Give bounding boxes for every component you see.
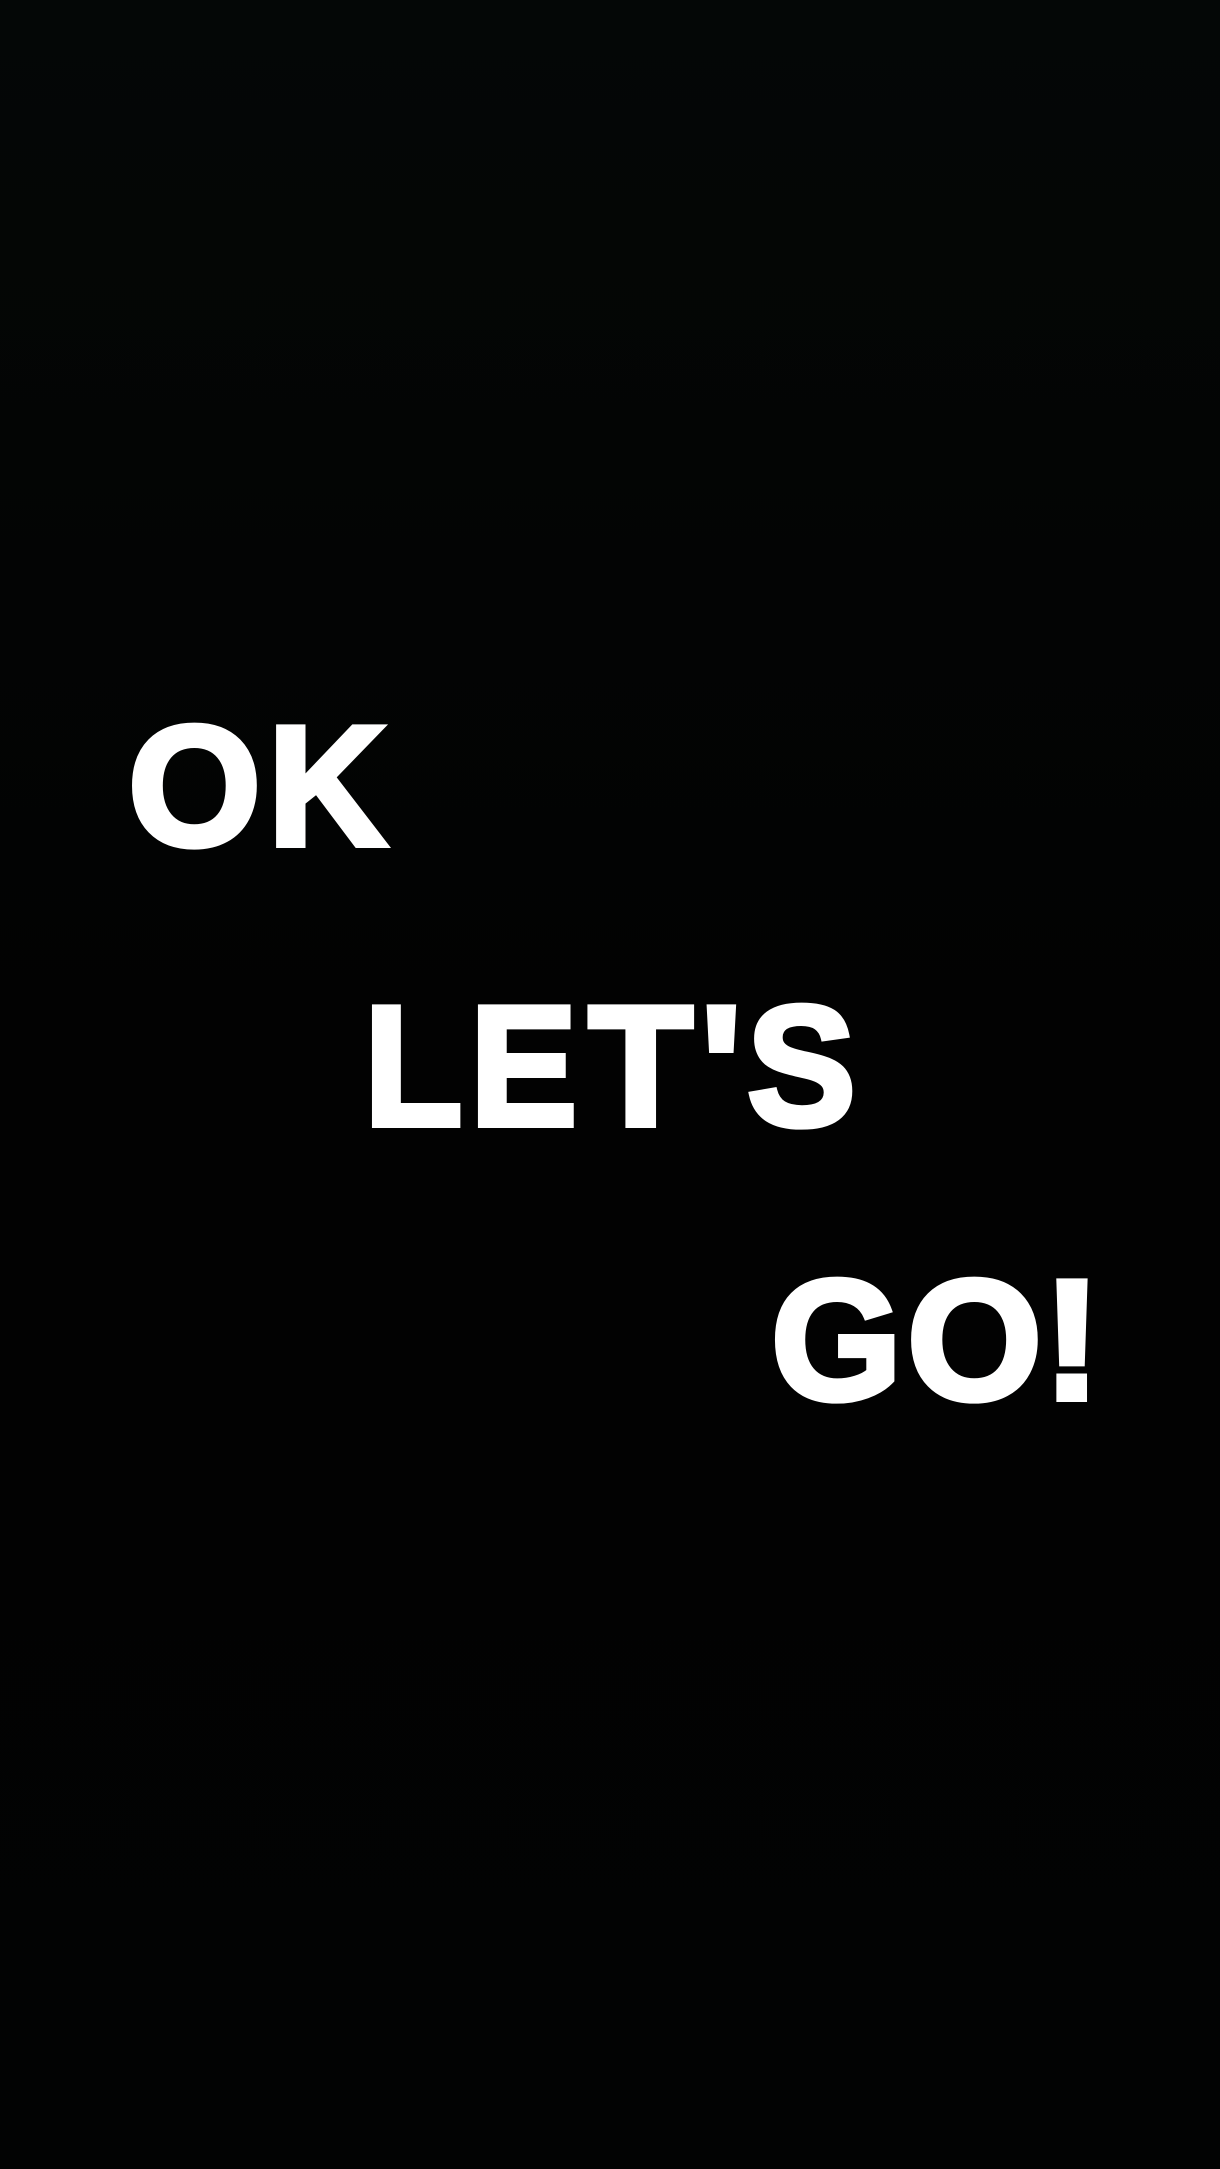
headline word: OK: K <box>268 690 387 882</box>
headline word: LET'S: T <box>588 971 693 1162</box>
headline word: LET'S: L <box>364 972 462 1162</box>
headline word: GO! <box>771 1244 1101 1436</box>
headline word: LET'S: S <box>747 972 856 1162</box>
headline word: OK: O <box>128 691 261 882</box>
headline word: GO!: ! <box>1043 1245 1101 1436</box>
headline word: GO!: G <box>771 1244 902 1435</box>
headline word: LET'S: ' <box>700 971 742 1162</box>
headline word: LET'S <box>364 971 856 1162</box>
headline word: OK <box>128 690 387 882</box>
headline word: GO!: O <box>907 1244 1042 1436</box>
headline word: LET'S: E <box>470 971 577 1162</box>
